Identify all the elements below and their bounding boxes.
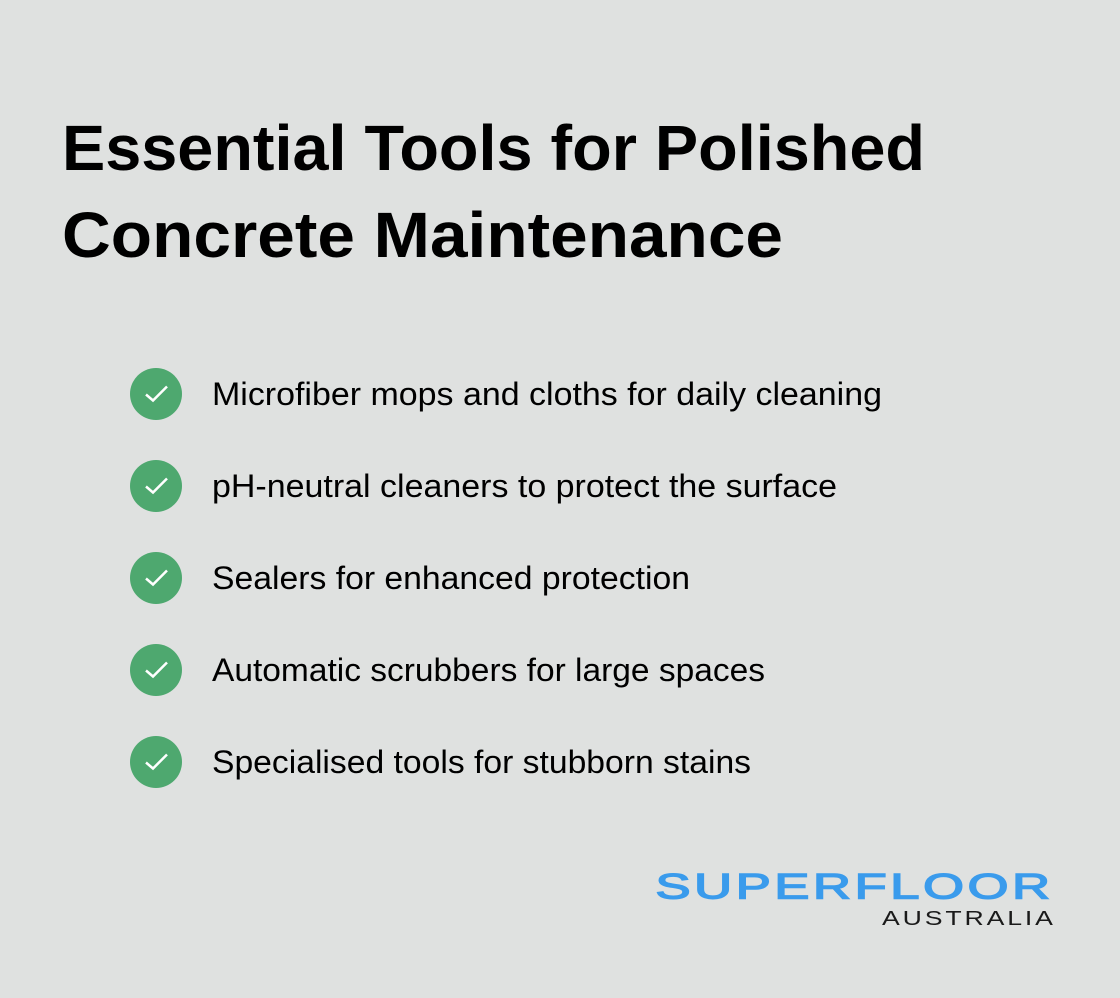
checklist <box>130 368 882 788</box>
item: specialised tools: Specialised tools for stubborn stains <box>212 744 751 780</box>
logo: Superfloor Australia: AUSTRALIA <box>882 907 1053 930</box>
item: microfiber mops: Microfiber mops and cloths for daily cleaning <box>212 376 882 412</box>
item: sealers: Sealers for enhanced protection <box>212 560 690 596</box>
item: pH-neutral cleaners: pH-neutral cleaners to protect the surface <box>212 468 837 504</box>
title: Essential Tools for Polished <box>62 112 925 184</box>
logo: Superfloor Australia <box>656 868 1053 930</box>
item: pH-neutral cleaners <box>130 460 837 512</box>
item: microfiber mops <box>130 368 882 420</box>
item: automatic scrubbers <box>130 644 765 696</box>
title <box>62 112 925 271</box>
logo: Superfloor Australia: SUPERFLOOR <box>656 868 1050 906</box>
item: sealers <box>130 552 690 604</box>
item: automatic scrubbers: Automatic scrubbers for large spaces <box>212 652 765 688</box>
title: Concrete Maintenance <box>62 199 783 271</box>
item: specialised tools <box>130 736 751 788</box>
